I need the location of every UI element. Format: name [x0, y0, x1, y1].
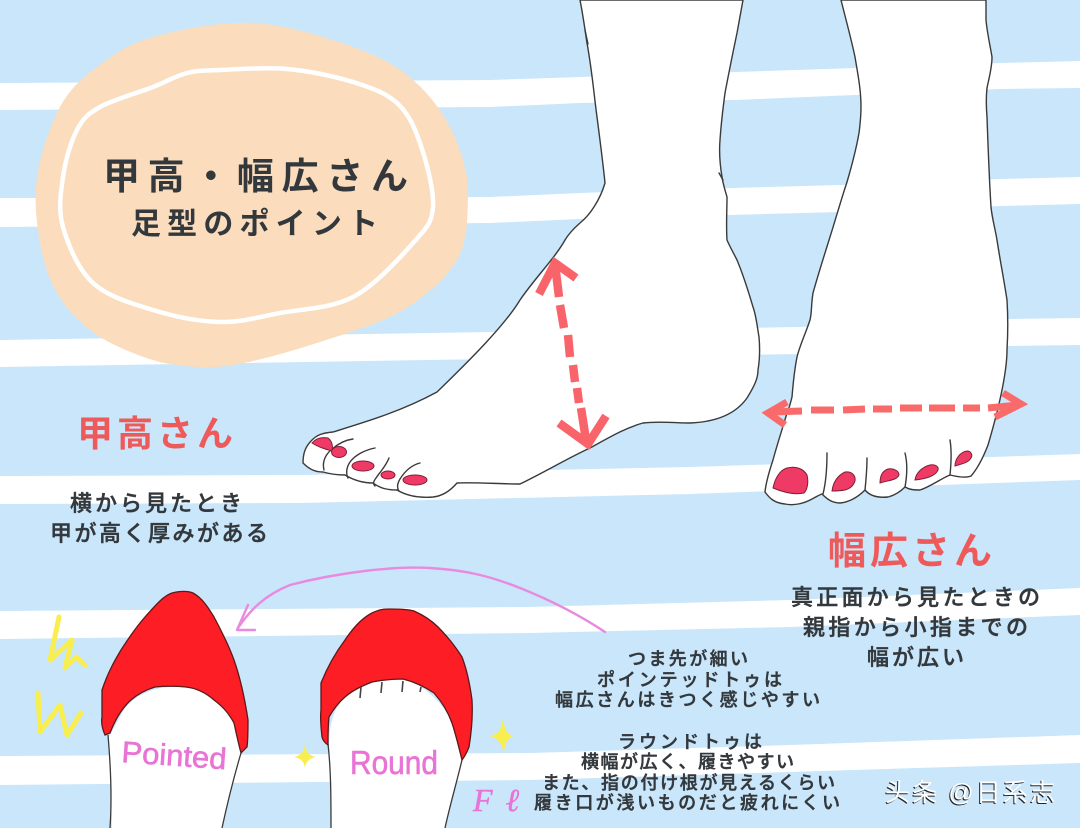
text: width description: 幅が広い: [867, 645, 964, 670]
red toe cap: [321, 609, 472, 760]
toe lines: [823, 440, 951, 494]
text: shoe advice: [534, 648, 840, 813]
text: instep description: 横から見たとき: [70, 491, 242, 516]
foot outline: [765, 0, 1008, 505]
foot: [329, 679, 462, 828]
side view foot: [303, 0, 760, 497]
watermark: 头条 @日系志: [885, 779, 1055, 807]
foot outline: [303, 0, 760, 497]
foot lines: [108, 735, 241, 828]
toe lines: [323, 30, 723, 491]
heading: 幅広さん: 幅広さん: [828, 531, 992, 573]
vertical double arrow: instep height: [539, 263, 606, 444]
label: Round: Round: [350, 744, 438, 781]
toenails: [773, 451, 972, 494]
peach blob: [36, 23, 468, 367]
front view foot: [765, 0, 1008, 505]
text: instep description: [50, 491, 268, 546]
text: shoe advice: ラウンドトゥは: [618, 732, 762, 752]
scribble top: [50, 617, 85, 668]
heading: 甲高さん: 甲高さん: [77, 413, 233, 454]
pink curved arrow: [237, 568, 605, 632]
star small: [294, 744, 316, 768]
text: shoe advice: 横幅が広く、履きやすい: [581, 751, 794, 772]
title line 1: 甲高・幅広さん: [103, 156, 408, 197]
red toe cap: [102, 592, 248, 753]
title badge: [36, 23, 468, 367]
toe stitch marks: [360, 681, 421, 698]
star large: [490, 718, 513, 753]
white ring: [60, 68, 433, 322]
label: Pointed: Pointed: [121, 736, 228, 776]
text: width description: 真正面から見たときの: [791, 585, 1040, 610]
title line 2: 足型のポイント: [131, 208, 378, 241]
foot: [109, 687, 241, 828]
text: shoe advice: ポインテッドトゥは: [597, 670, 782, 690]
watermark: 头条 @日系志: [884, 780, 1054, 808]
text: instep description: 甲が高く厚みがある: [50, 521, 268, 546]
pointed toe shoe: [102, 592, 248, 828]
pink handwritten mark: Fℓ: [472, 782, 520, 818]
yellow sparkle scribbles: [38, 617, 513, 768]
text: shoe advice: 履き口が浅いものだと疲れにくい: [534, 792, 840, 813]
scribble bottom: [38, 693, 81, 735]
foot lines: [328, 744, 462, 828]
text: shoe advice: 幅広さんはきつく感じやすい: [555, 690, 820, 710]
text: width description: [791, 585, 1040, 670]
text: width description: 親指から小指までの: [803, 615, 1028, 640]
round toe shoe: [321, 609, 472, 828]
text: shoe advice: つま先が細い: [628, 648, 748, 669]
toenails: [312, 438, 427, 485]
text: shoe advice: また、指の付け根が見えるくらい: [542, 772, 835, 793]
horizontal double arrow: foot width: [768, 393, 1021, 425]
